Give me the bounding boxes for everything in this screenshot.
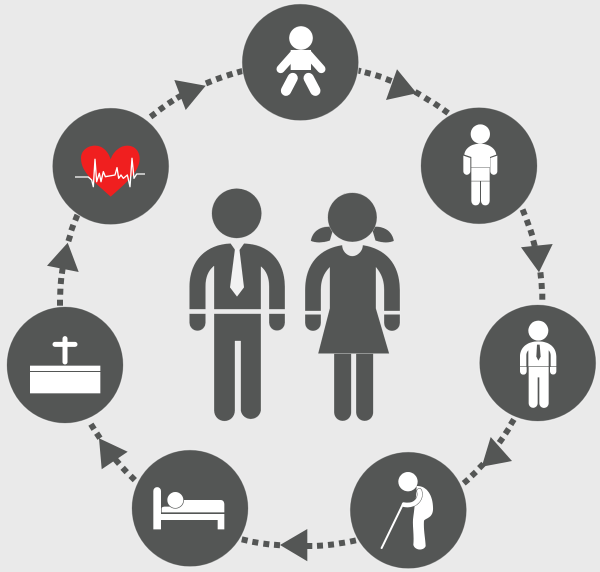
figure: man in suit: [189, 188, 285, 421]
icon: baby: [281, 26, 321, 91]
icon: heart with pulse line: [75, 146, 145, 197]
icon: person in bed: [153, 487, 224, 529]
tie: [536, 345, 541, 361]
panel: central couple: [189, 188, 400, 421]
panel: health stage: [52, 108, 169, 225]
arrow: baby to child: [354, 67, 450, 115]
icon: elderly person with cane: [382, 472, 433, 550]
figure: girl in dress: [305, 193, 400, 421]
icon: child: [463, 124, 497, 205]
arrow: man to old person: [462, 418, 516, 486]
panel: death stage: [6, 306, 124, 424]
icon: man with tie: [520, 321, 556, 408]
arrow: grave to heart: [47, 214, 80, 306]
panel: sick in bed stage: [132, 450, 248, 567]
arrow: old person to bed: [241, 529, 357, 561]
panel: adult stage: [479, 304, 596, 422]
arrow: bed to grave: [88, 423, 137, 482]
tie: [230, 249, 244, 297]
panel: baby stage: [242, 4, 359, 121]
arrow: child to man: [520, 208, 553, 300]
panel: old age stage: [350, 452, 467, 569]
icon: grave with cross: [30, 339, 100, 393]
arrow: heart to baby: [149, 68, 244, 119]
panel: child stage: [420, 107, 538, 224]
